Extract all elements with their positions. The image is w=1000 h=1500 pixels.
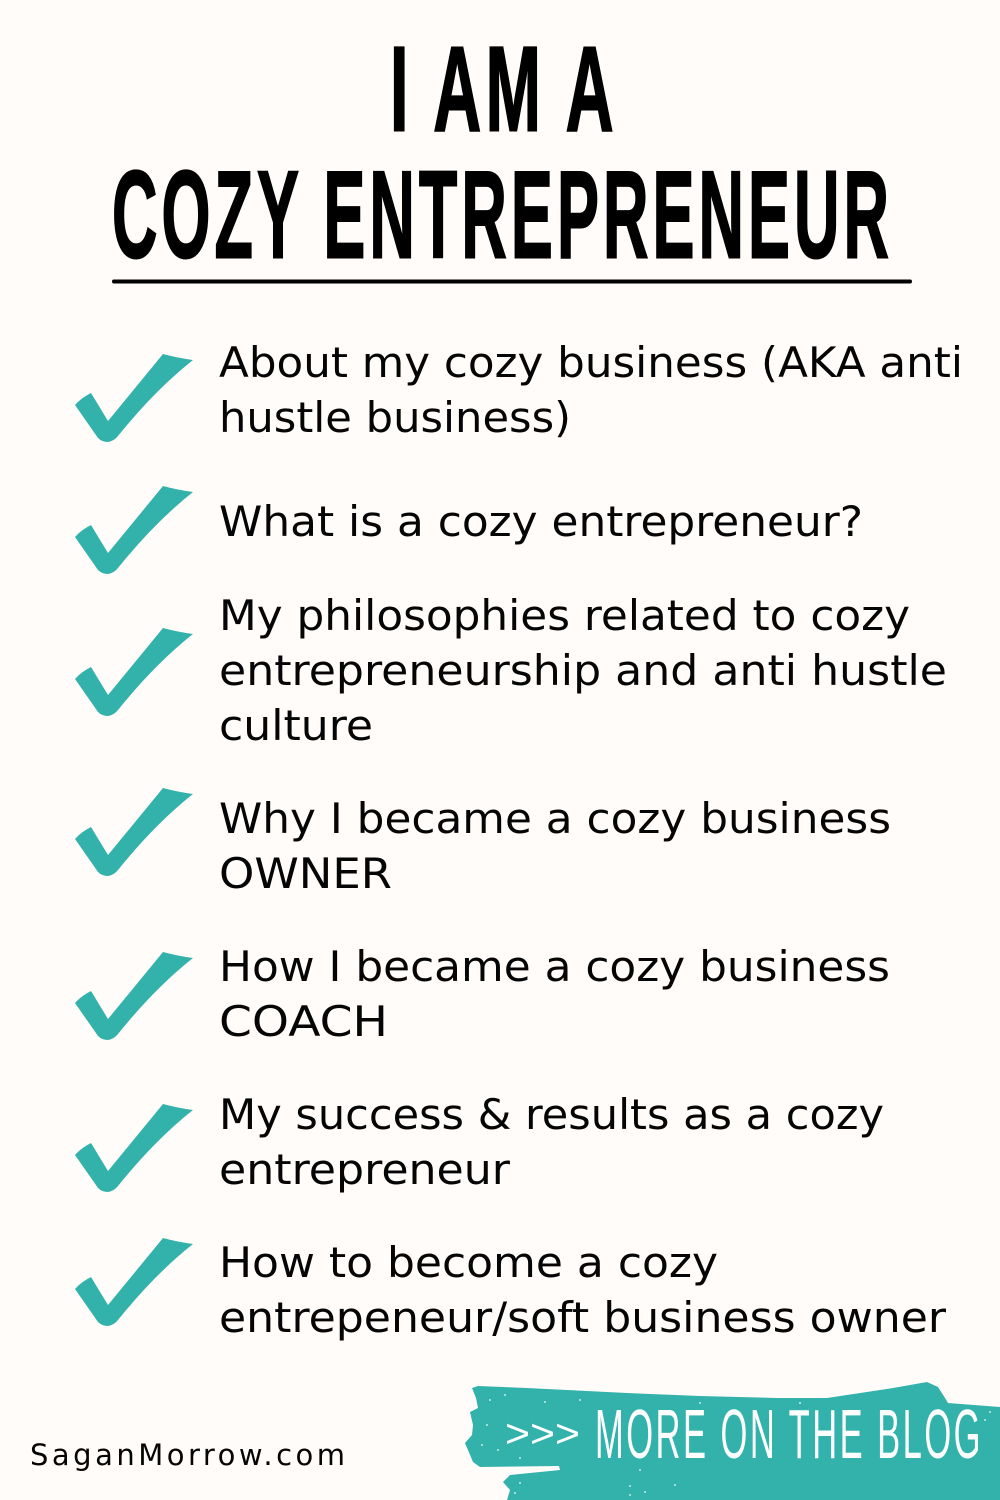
- call to action banner: [465, 1382, 1000, 1500]
- text: my success and results: entrepreneur: [219, 1145, 511, 1194]
- website: SaganMorrow.com: [30, 1438, 345, 1472]
- text: my philosophies: My philosophies related to cozy: [219, 591, 910, 640]
- text: my philosophies: culture: [219, 701, 373, 750]
- text: how I became a coach: [219, 942, 890, 1046]
- brush stroke: [465, 1382, 1000, 1500]
- text: how to become: How to become a cozy: [219, 1238, 718, 1287]
- icon: check mark: [75, 1238, 193, 1326]
- item 5: [75, 942, 890, 1046]
- title: [112, 20, 893, 284]
- text: how to become: [219, 1238, 947, 1342]
- icon: check mark: [75, 1104, 193, 1192]
- icon: check mark: [75, 354, 193, 442]
- text: how to become: entrepeneur/soft business owner: [219, 1293, 947, 1342]
- text: how I became a coach: COACH: [219, 997, 388, 1046]
- text: why I became an owner: Why I became a cozy business: [219, 794, 891, 843]
- checklist: [75, 338, 963, 1342]
- icon: check mark: [75, 788, 193, 876]
- text: my philosophies: entrepreneurship and anti hustle: [219, 646, 947, 695]
- text: how I became a coach: How I became a cozy business: [219, 942, 890, 991]
- icon: check mark: [75, 628, 193, 716]
- item 6: [75, 1090, 884, 1194]
- text: my success and results: My success & results as a cozy: [219, 1090, 884, 1139]
- text: about my cozy business: About my cozy business (AKA anti: [219, 338, 963, 387]
- item 1: [75, 338, 963, 442]
- text: why I became an owner: OWNER: [219, 849, 392, 898]
- text: my success and results: [219, 1090, 884, 1194]
- text: my philosophies: [219, 591, 947, 750]
- banner arrows: >>>: [505, 1412, 580, 1456]
- speckles: [481, 1394, 991, 1496]
- title underline: [112, 280, 912, 284]
- text: about my cozy business: [219, 338, 963, 442]
- title: I AM A: [390, 20, 618, 156]
- text: why I became an owner: [219, 794, 891, 898]
- icon: check mark: [75, 486, 193, 574]
- icon: check mark: [75, 952, 193, 1040]
- item 7: [75, 1238, 947, 1342]
- item 4: [75, 788, 891, 898]
- text: what is a cozy entrepreneur: What is a cozy entrepreneur?: [219, 497, 863, 546]
- item 2: [75, 486, 863, 574]
- text: about my cozy business: hustle business): [219, 393, 571, 442]
- item 3: [75, 591, 947, 750]
